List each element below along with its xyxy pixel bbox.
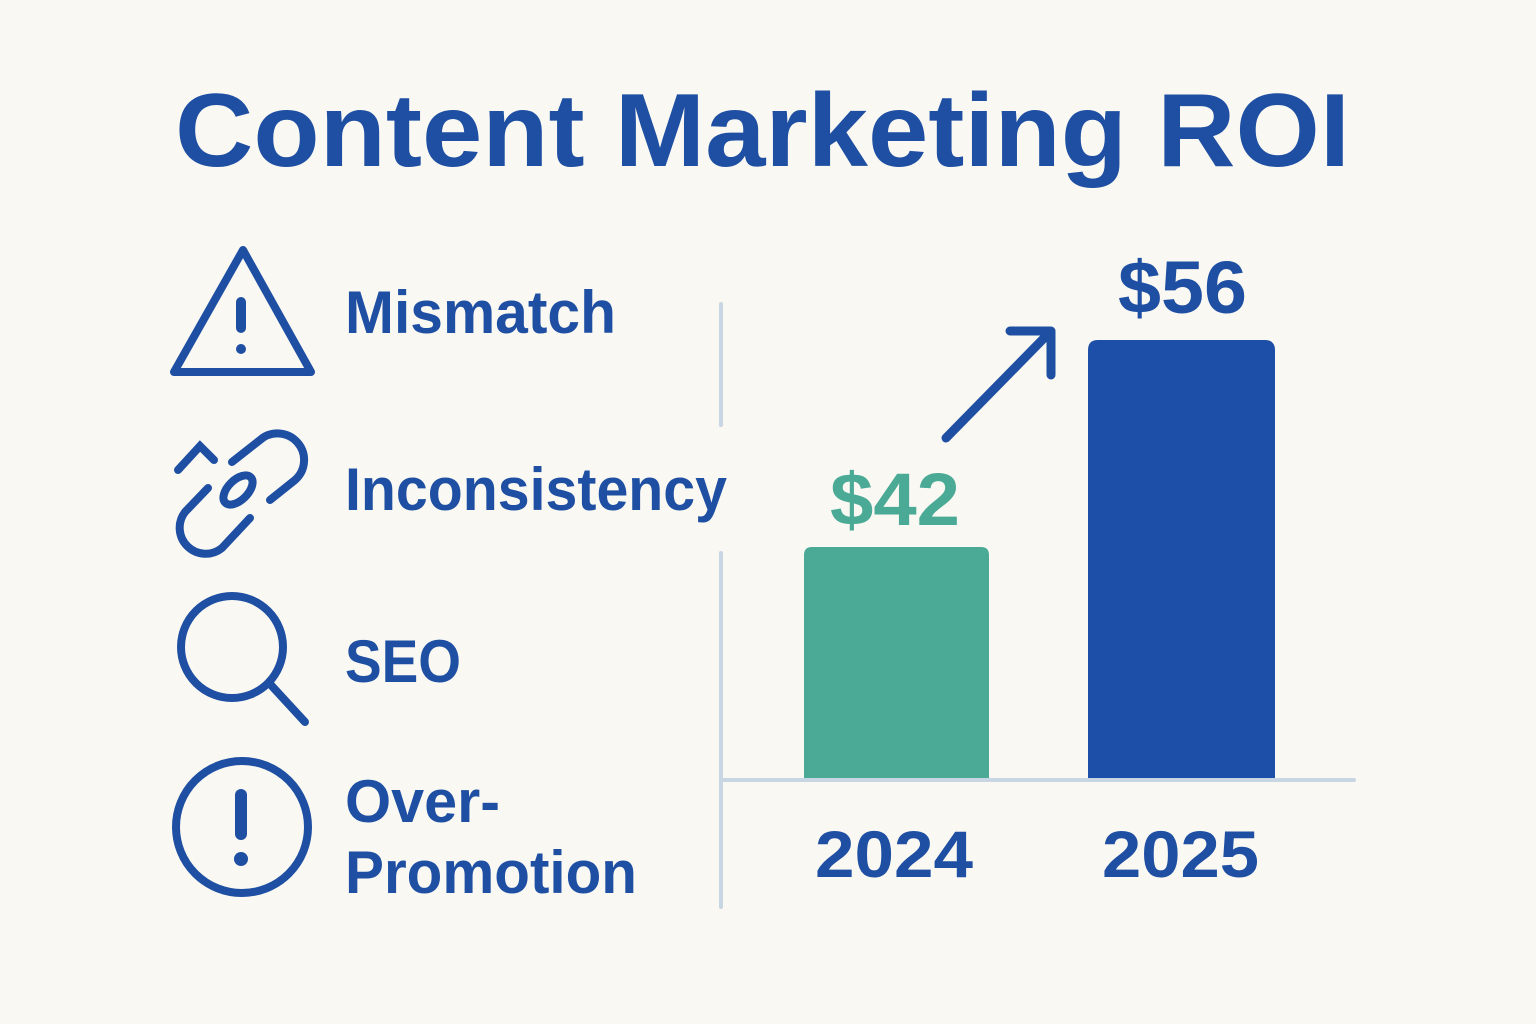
year labels: 2025 — [1102, 817, 1259, 891]
label: Over-Promotion — [345, 768, 637, 906]
bar: 2025 — [1088, 340, 1275, 778]
label: SEO: SEO — [345, 628, 461, 695]
value: $56: $56 — [1118, 246, 1247, 329]
title: Content Marketing ROI — [175, 73, 1350, 189]
value: $42: $42 — [830, 458, 960, 541]
icon: circle exclamation — [176, 761, 308, 893]
bar: 2024 — [804, 547, 989, 778]
label: Mismatch: Mismatch — [345, 279, 616, 346]
label: Over-Promotion: Over- — [345, 768, 500, 835]
label: Inconsistency: Inconsistency — [345, 456, 728, 523]
year labels: 2024 — [815, 817, 973, 891]
icon: warning triangle — [174, 250, 311, 372]
icon: magnifier — [181, 596, 305, 722]
arrow: growth — [946, 331, 1051, 438]
divider lines — [721, 304, 1354, 907]
icon: broken chain — [178, 433, 304, 554]
year labels — [815, 817, 1259, 891]
label: Over-Promotion: Promotion — [345, 839, 637, 906]
